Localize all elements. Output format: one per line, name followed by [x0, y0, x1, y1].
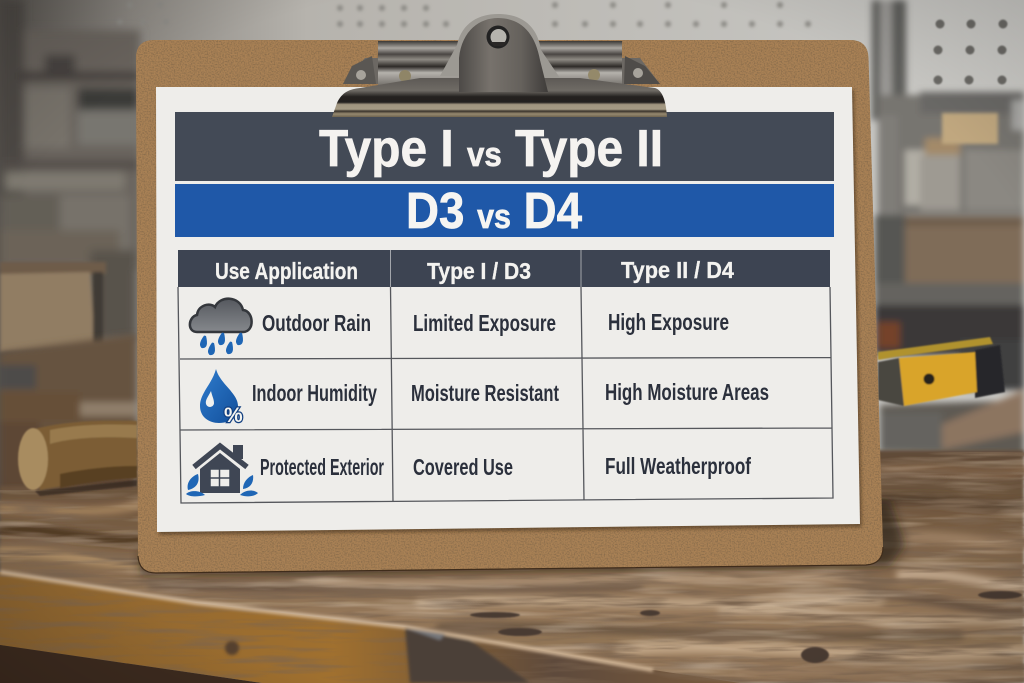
cell: high exposure: High Exposure [608, 309, 729, 335]
label: protected exterior: Protected Exterior [260, 454, 384, 480]
clip base plate [343, 41, 660, 85]
right side clutter [872, 0, 1024, 455]
table underside [0, 645, 262, 683]
row: protected exterior [186, 445, 751, 496]
wooden dowel [18, 421, 137, 496]
comparison table [178, 250, 833, 503]
header: type II / D4: Type II / D4 [621, 257, 734, 283]
board shadow [140, 500, 905, 575]
table surface [0, 450, 1024, 683]
paper sheet [156, 87, 862, 535]
icon: water drop with percent [200, 369, 243, 427]
table grid [178, 287, 833, 503]
table front edge [0, 572, 740, 683]
cell: full weatherproof: Full Weatherproof [605, 453, 751, 479]
cell: moisture resistant: Moisture Resistant [411, 380, 559, 406]
label: indoor humidity: Indoor Humidity [252, 380, 377, 406]
table header row [178, 250, 830, 287]
cell: high moisture areas: High Moisture Areas [605, 379, 769, 405]
title text: Type I vs Type II [319, 120, 663, 178]
title banner: Type I vs Type II [175, 112, 834, 181]
clip lower bar [332, 78, 667, 117]
cell: limited exposure: Limited Exposure [413, 310, 556, 336]
icon: rain cloud [190, 299, 252, 354]
label: outdoor rain: Outdoor Rain [262, 310, 371, 336]
subtitle text: D3 vs D4 [406, 182, 583, 239]
header: use application: Use Application [215, 258, 358, 284]
clipboard board [136, 40, 883, 573]
row: outdoor rain [190, 299, 729, 354]
icon: water drop with percent: % [224, 404, 243, 427]
metal clip [332, 14, 667, 117]
cell: covered use: Covered Use [413, 454, 513, 480]
clip hump [440, 14, 560, 92]
header: type I / D3: Type I / D3 [427, 258, 531, 284]
subtitle banner: D3 vs D4 [175, 182, 834, 239]
icon: house with splashes [186, 445, 258, 496]
row: indoor humidity [200, 369, 769, 427]
left shelves [0, 0, 140, 340]
